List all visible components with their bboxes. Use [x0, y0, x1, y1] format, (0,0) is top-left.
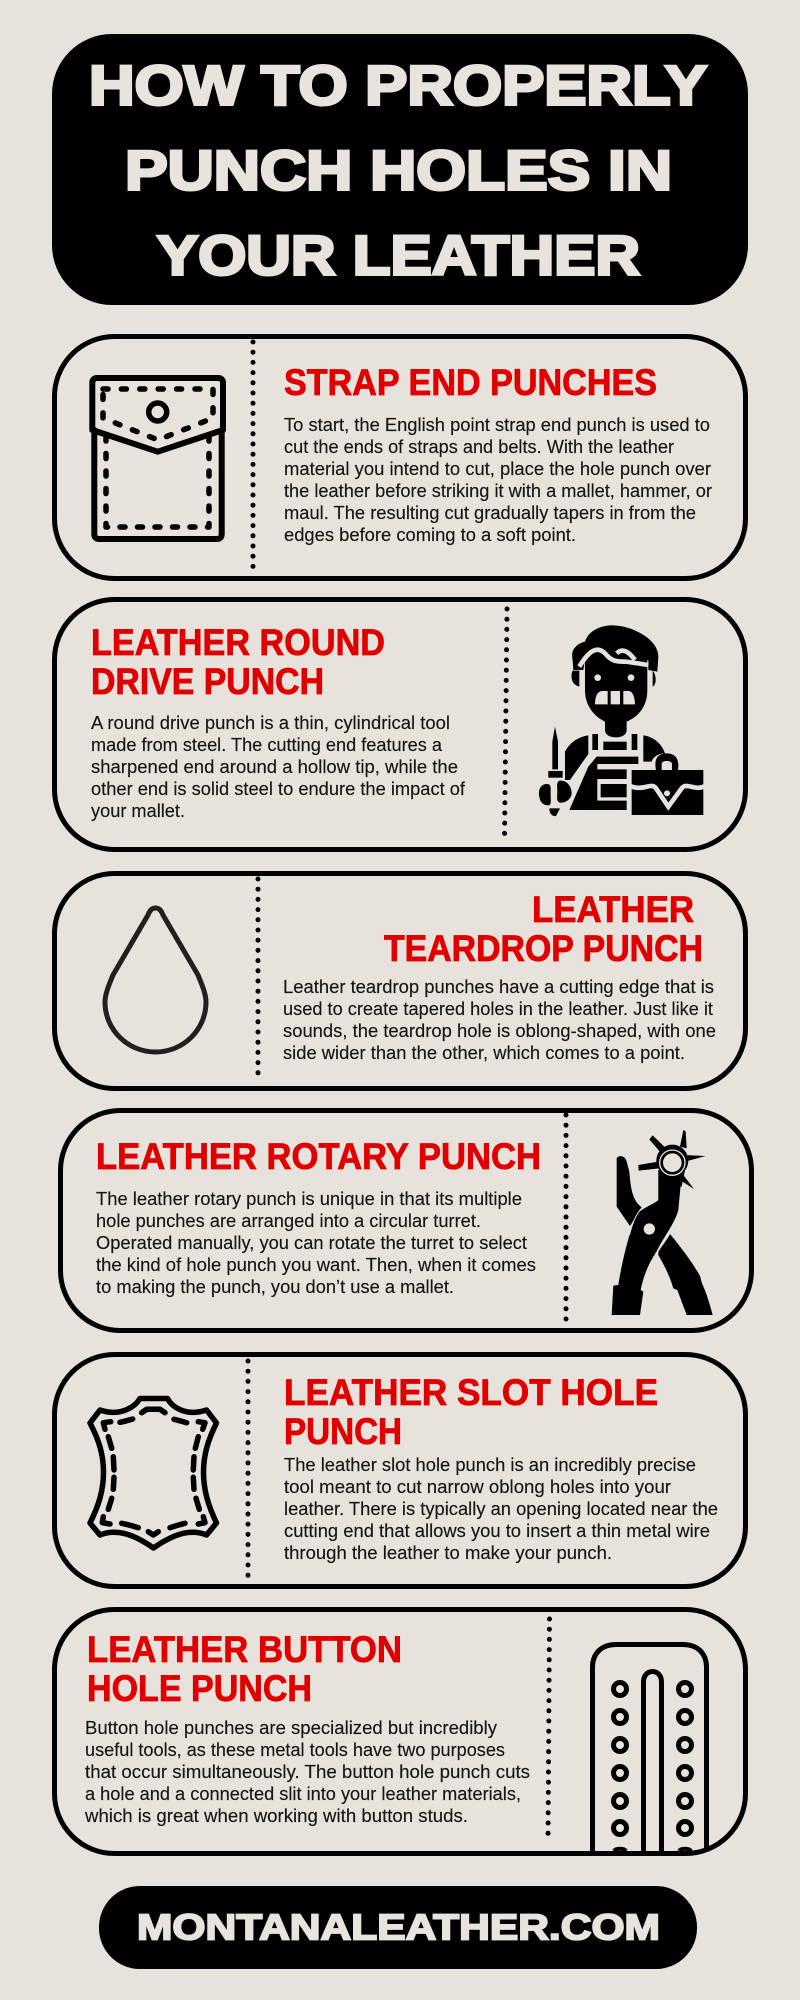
body text: material you intend to cut, place the hole punch over — [284, 458, 711, 479]
body text: the kind of hole punch you want. Then, when it comes — [96, 1254, 536, 1275]
icon: teardrop outline — [105, 908, 206, 1052]
body text: side wider than the other, which comes to a point. — [283, 1042, 685, 1063]
body text: the leather before striking it with a mallet, hammer, or — [284, 480, 712, 501]
body text — [283, 976, 716, 1063]
title banner — [52, 34, 748, 305]
body text: hole punches are arranged into a circular turret. — [96, 1210, 481, 1231]
panel: strap end punches — [54, 336, 746, 578]
body text: used to create tapered holes in the leather. Just like it — [283, 998, 713, 1019]
body text — [96, 1188, 536, 1297]
body text: edges before coming to a soft point. — [284, 524, 576, 545]
body text: A round drive punch is a thin, cylindrical tool — [91, 712, 450, 733]
body text: The leather slot hole punch is an incredibly precise — [284, 1454, 696, 1475]
heading: TEARDROP PUNCH — [384, 928, 703, 969]
body text — [284, 1454, 718, 1563]
body text: your mallet. — [91, 800, 185, 821]
icon: stitched pocket — [92, 378, 223, 539]
panel: leather teardrop punch — [54, 874, 746, 1088]
heading — [284, 1372, 658, 1452]
body text: useful tools, as these metal tools have two purposes — [85, 1739, 505, 1760]
title text: YOUR LEATHER — [157, 224, 640, 286]
body text: maul. The resulting cut gradually tapers in from the — [284, 502, 696, 523]
heading — [384, 889, 703, 969]
icon: leather hide — [90, 1398, 216, 1548]
body text: which is great when working with button studs. — [84, 1805, 468, 1826]
title text: PUNCH HOLES IN — [125, 138, 672, 202]
body text: through the leather to make your punch. — [284, 1542, 612, 1563]
body text: To start, the English point strap end punch is used to — [284, 414, 710, 435]
body text — [284, 414, 712, 545]
body text: leather. There is typically an opening located near the — [284, 1498, 718, 1519]
body text: a hole and a connected slit into your leather materials, — [85, 1783, 521, 1804]
panel: leather round drive punch — [54, 600, 746, 850]
body text: The leather rotary punch is unique in that its multiple — [96, 1188, 522, 1209]
heading: STRAP END PUNCHES — [284, 362, 657, 403]
panel: leather rotary punch — [60, 1110, 752, 1330]
body text: sounds, the teardrop hole is oblong-shaped, with one — [283, 1020, 716, 1041]
body text: Button hole punches are specialized but incredibly — [85, 1717, 498, 1738]
heading: LEATHER ROTARY PUNCH — [96, 1136, 541, 1177]
footer banner — [99, 1886, 697, 1969]
heading: PUNCH — [284, 1411, 402, 1452]
body text: to making the punch, you don’t use a mallet. — [96, 1276, 454, 1297]
heading: LEATHER ROUND — [91, 622, 385, 663]
icon: leather worker — [539, 625, 705, 816]
body text: Leather teardrop punches have a cutting edge that is — [283, 976, 714, 997]
body text: tool meant to cut narrow oblong holes into your — [284, 1476, 671, 1497]
panel: leather slot hole punch — [54, 1354, 746, 1586]
heading: LEATHER BUTTON — [87, 1629, 402, 1670]
heading: LEATHER SLOT HOLE — [284, 1372, 658, 1413]
icon: button hole punch tool — [592, 1644, 706, 1851]
panel: leather button hole punch — [54, 1610, 746, 1854]
heading: HOLE PUNCH — [87, 1668, 312, 1709]
body text — [84, 1717, 530, 1826]
website text: MONTANALEATHER.COM — [137, 1906, 660, 1948]
body text: other end is solid steel to endure the impact of — [91, 778, 466, 799]
body text: made from steel. The cutting end features a — [91, 734, 443, 755]
body text — [91, 712, 466, 821]
title text — [89, 54, 707, 286]
heading — [91, 622, 385, 702]
heading: LEATHER — [532, 889, 694, 930]
body text: Operated manually, you can rotate the turret to select — [96, 1232, 527, 1253]
body text: that occur simultaneously. The button hole punch cuts — [85, 1761, 530, 1782]
body text: sharpened end around a hollow tip, while the — [91, 756, 458, 777]
heading: DRIVE PUNCH — [91, 661, 324, 702]
icon: rotary punch pliers — [612, 1130, 713, 1315]
body text: cutting end that allows you to insert a thin metal wire — [284, 1520, 710, 1541]
heading — [87, 1629, 402, 1709]
body text: cut the ends of straps and belts. With the leather — [284, 436, 674, 457]
title text: HOW TO PROPERLY — [89, 54, 707, 116]
